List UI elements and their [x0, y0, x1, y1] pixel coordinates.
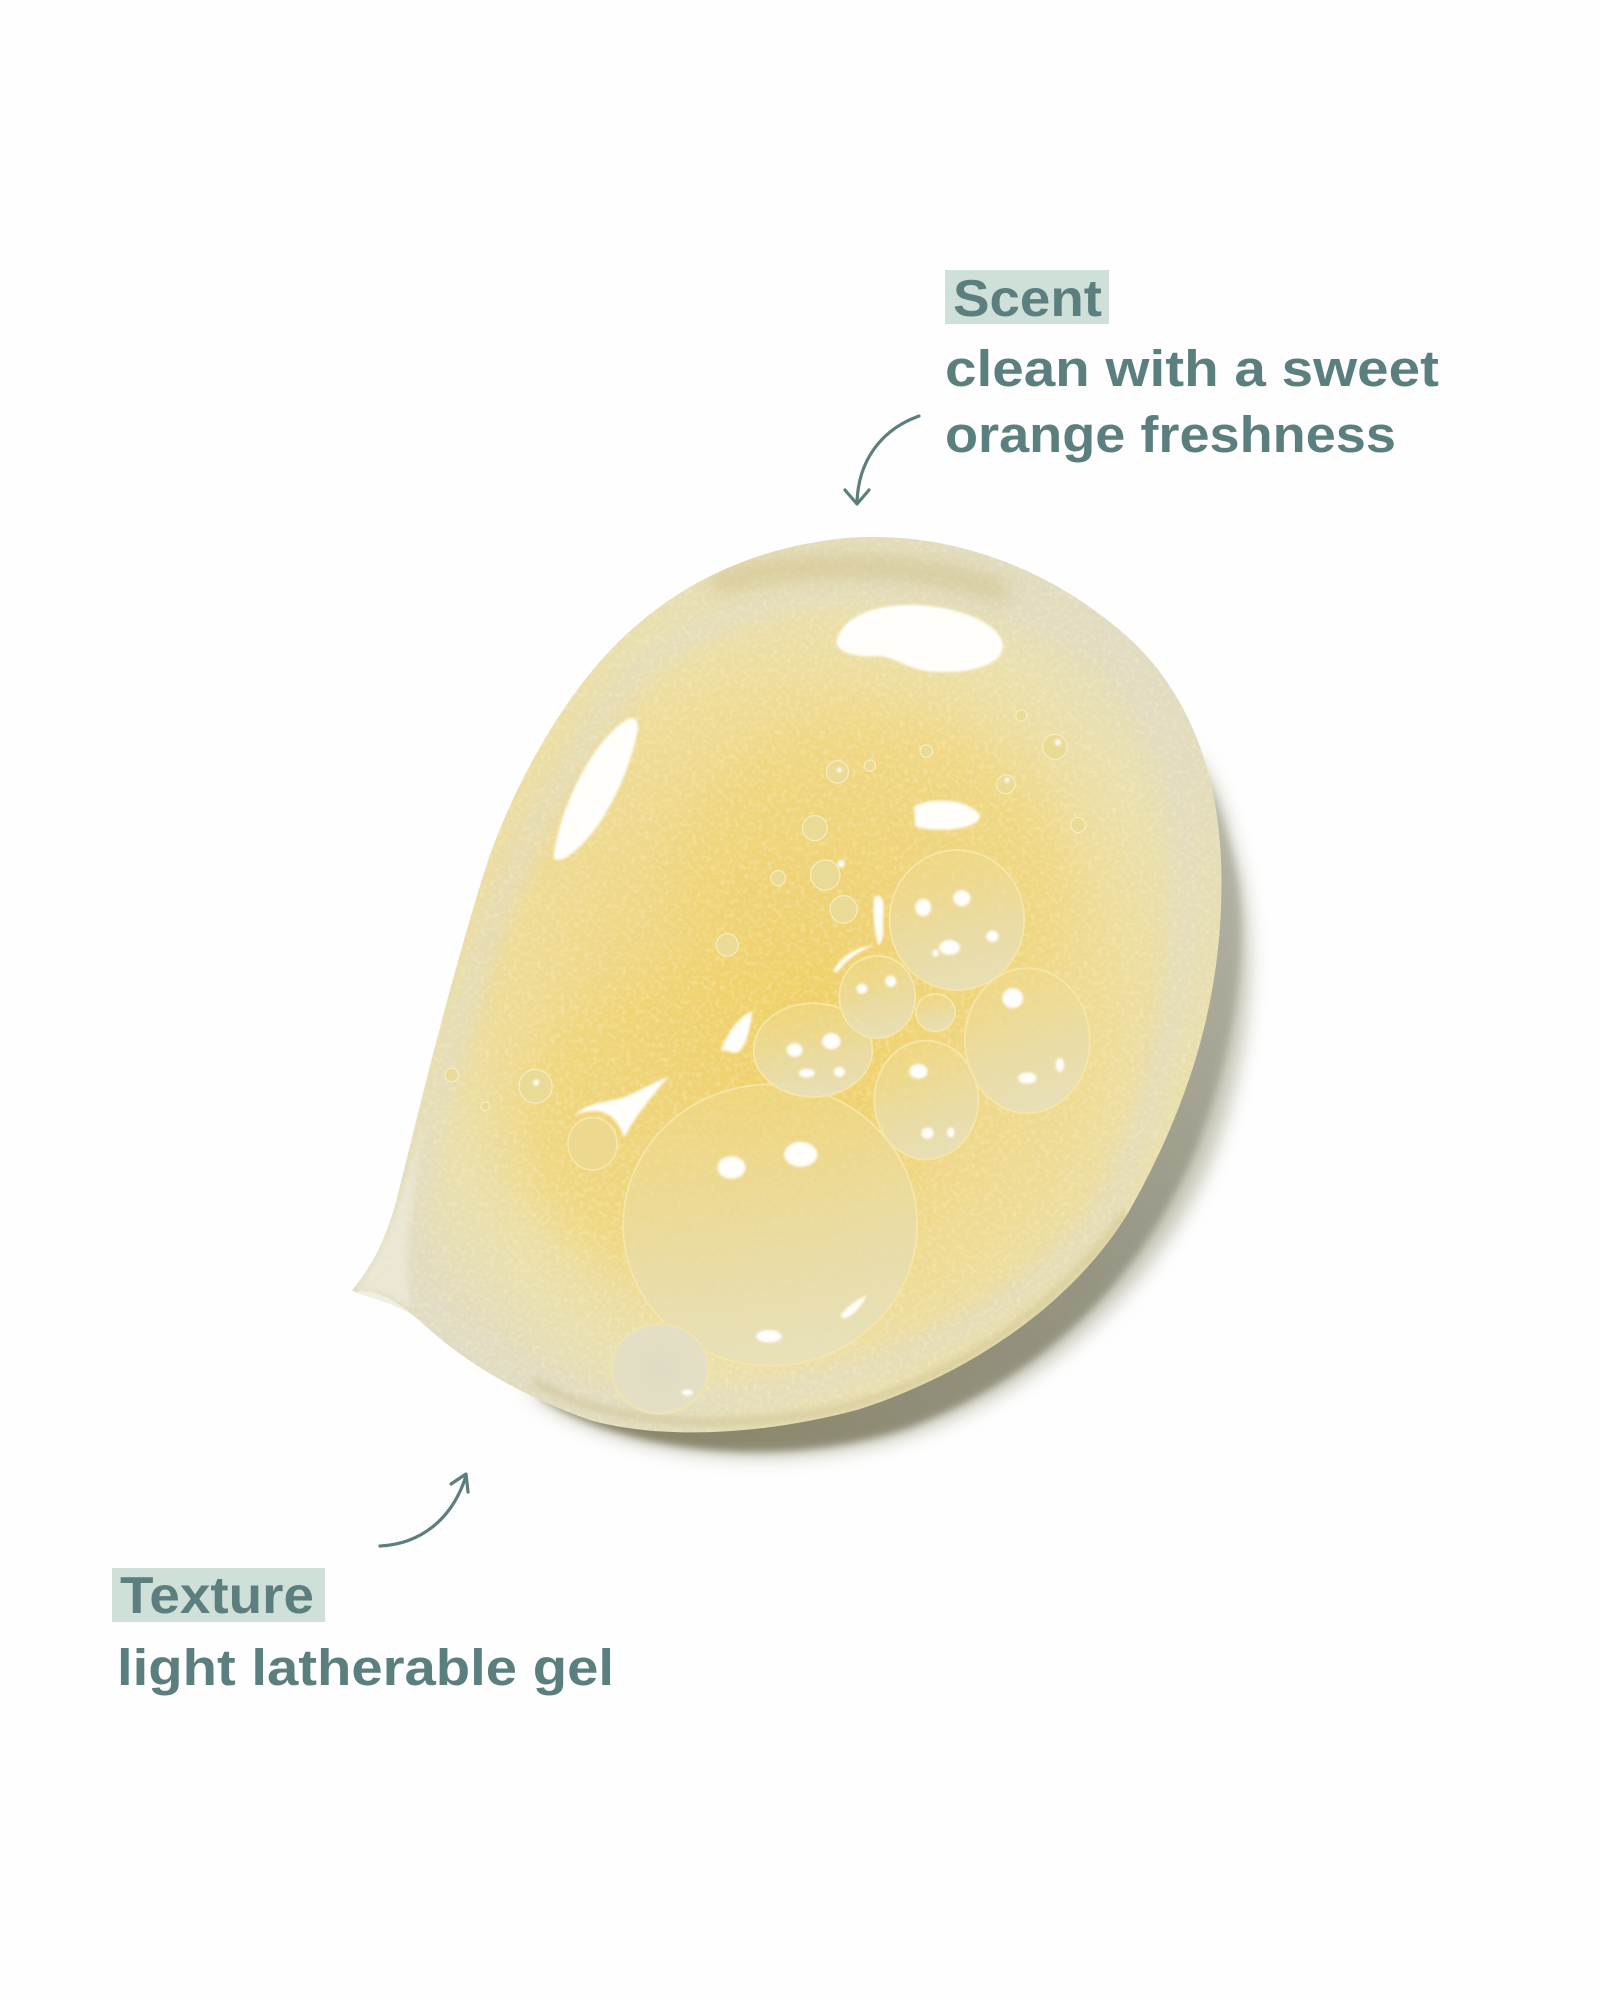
callout: texture: [112, 1567, 614, 1696]
soft outer shadow: [522, 744, 1249, 1457]
label highlight: scent: [945, 270, 1109, 324]
heading: texture: Texture: [120, 1567, 314, 1625]
gel colour depth and grain: [357, 538, 1219, 1432]
description: scent line 2: orange freshness: [945, 406, 1396, 463]
white gloss highlights: [533, 605, 1064, 1396]
large bubbles: [568, 850, 1090, 1414]
arrow: scent to swatch: [845, 416, 919, 504]
description: scent line 1: clean with a sweet: [945, 340, 1439, 397]
description: texture: light latherable gel: [117, 1639, 614, 1696]
gel body: [352, 537, 1221, 1432]
arrow: texture to swatch: [380, 1474, 468, 1546]
label highlight: texture: [112, 1568, 325, 1622]
small bubbles: [445, 710, 1086, 1111]
callout: scent: [945, 270, 1439, 463]
gel swatch: [352, 536, 1260, 1468]
drop shadow: [534, 744, 1241, 1452]
heading: scent: Scent: [953, 270, 1102, 328]
